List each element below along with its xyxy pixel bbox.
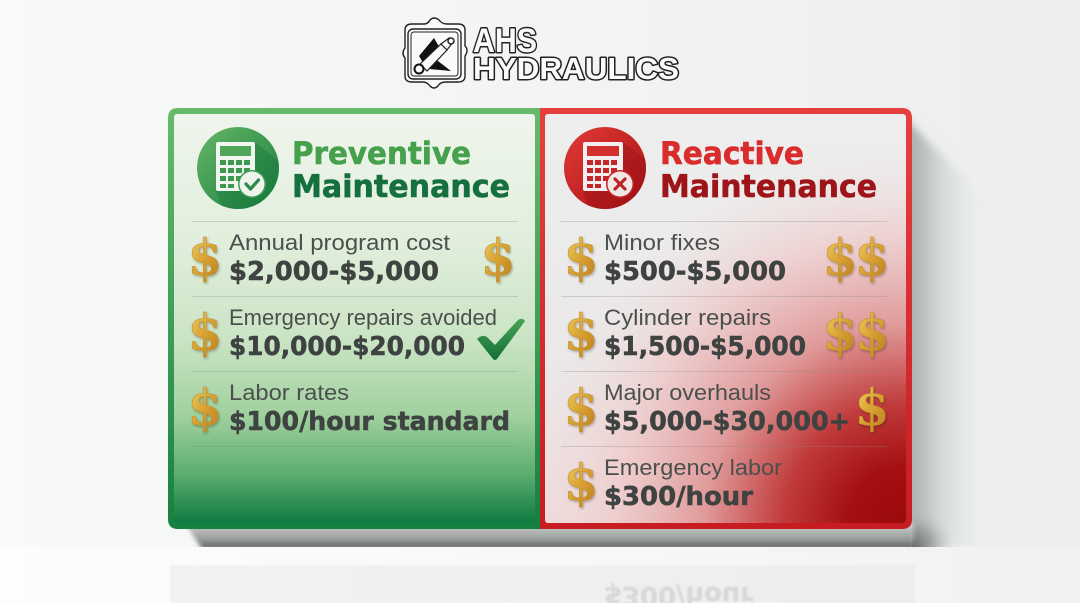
row: annual program cost [188,228,515,287]
row: cylinder repairs [564,303,889,362]
heading: reactive maintenance [660,136,877,205]
panel reflection on floor [170,565,915,603]
panel: preventive maintenance [168,108,540,529]
row: annual program cost: $ [188,228,222,287]
panel drop shadow [184,118,985,549]
icon: calculator with check [197,127,279,209]
row: minor fixes: $ [823,228,857,287]
logo wordmark [473,22,679,86]
green panel fill [174,114,535,523]
heading: reactive maintenance: Reactive [660,136,804,172]
row: labor rates: Labor rates [229,380,349,405]
row: emergency labor [564,453,782,512]
row: minor fixes: Minor fixes [604,230,720,255]
row: cylinder repairs: Cylinder repairs [604,305,771,330]
logo wordmark: AHS [473,22,537,60]
row: annual program cost: $ [481,228,515,287]
row: labor rates: $100/hour standard [229,407,510,437]
row: annual program cost: Annual program cost [229,230,450,255]
row: cylinder repairs: $ [823,303,857,362]
row: annual program cost: $2,000-$5,000 [229,257,439,287]
row: emergency repairs avoided: $ [188,303,222,362]
heading: reactive maintenance: Maintenance [660,169,877,205]
icon: calculator with cross [564,127,646,209]
row: emergency repairs avoided [188,303,525,362]
heading: preventive maintenance: Maintenance [292,169,510,205]
row: emergency labor: Emergency labor [604,455,782,480]
row: major overhauls: $ [564,378,598,437]
logo: AHS Hydraulics [403,18,679,88]
red corner glow [545,114,906,523]
red panel fill [545,114,906,523]
green frame [168,108,540,529]
logo wordmark: HYDRAULICS [473,51,679,86]
row: minor fixes: $ [855,228,889,287]
row: major overhauls: $ [855,378,889,437]
row: cylinder repairs: $ [564,303,598,362]
icon: green check mark [477,319,525,360]
row: labor rates: $ [188,378,222,437]
heading: preventive maintenance [292,136,510,205]
row: minor fixes [564,228,889,287]
heading: preventive maintenance: Preventive [292,136,471,172]
row: emergency labor: $300/hour [604,482,753,512]
row: major overhauls: $5,000-$30,000+ [604,407,850,437]
floor [0,547,1080,603]
row: emergency labor: $ [564,453,598,512]
red frame [540,108,912,529]
panel: reactive maintenance [540,108,912,529]
row: cylinder repairs: $1,500-$5,000 [604,332,806,362]
row: major overhauls [564,378,889,437]
icon: hydraulic cylinder emblem [403,18,467,88]
row: labor rates [188,378,510,437]
row: minor fixes: $500-$5,000 [604,257,786,287]
row: emergency repairs avoided: Emergency repairs avoided [229,305,497,330]
row: cylinder repairs: $ [855,303,889,362]
row: major overhauls: Major overhauls [604,380,771,405]
row: emergency repairs avoided: $10,000-$20,000 [229,332,465,362]
row: minor fixes: $ [564,228,598,287]
